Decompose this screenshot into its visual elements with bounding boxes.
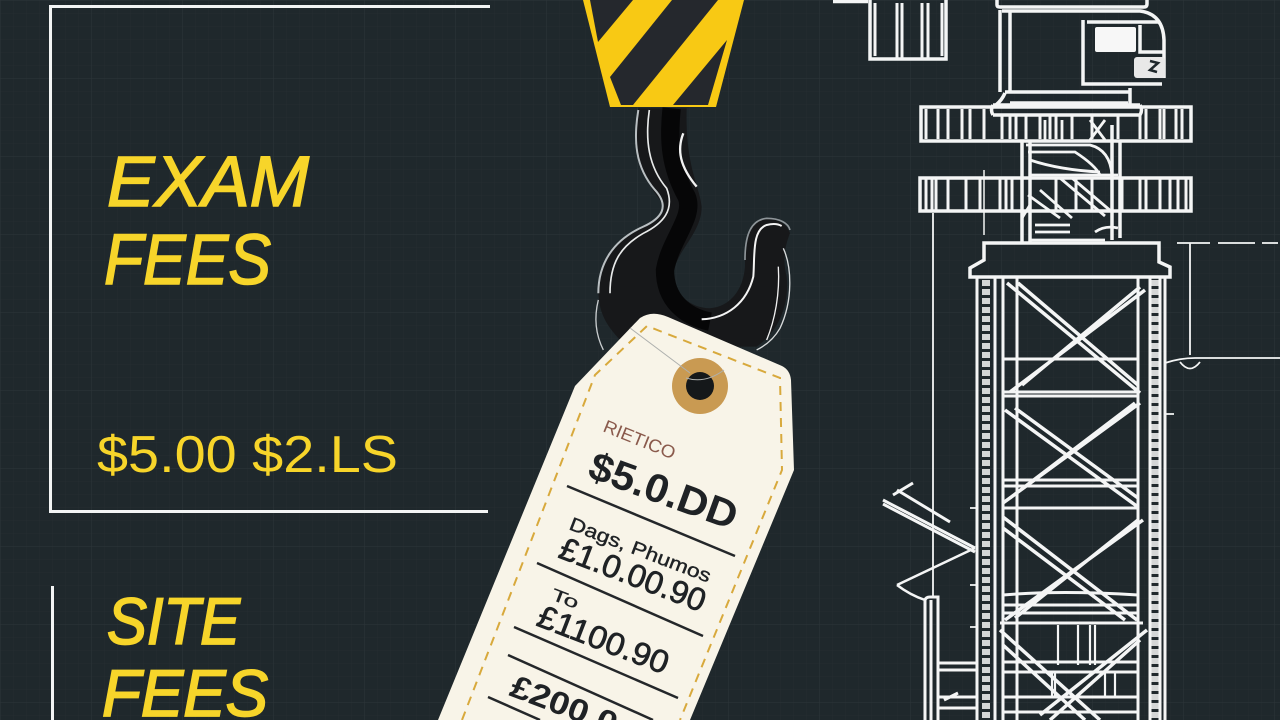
tag text: To <box>549 585 582 613</box>
tag eyelet <box>630 328 728 414</box>
blueprint: tower head <box>970 243 1170 277</box>
blueprint: tower structure <box>977 277 1165 720</box>
blueprint: window unit <box>833 0 946 59</box>
tag text: $5.0.DD <box>583 444 744 538</box>
blueprint: crane tower <box>833 0 1280 720</box>
site panel frame <box>51 586 54 720</box>
tag text: RIETICO <box>601 416 678 463</box>
heading: exam fees: FEES <box>104 221 271 300</box>
blueprint: upper platform <box>921 105 1191 141</box>
blueprint: ladder <box>925 597 977 720</box>
tag body <box>438 314 794 720</box>
tag text: Dags, Phumos <box>566 514 714 587</box>
blueprint: lower platform <box>920 178 1191 211</box>
tag stitching <box>462 326 782 720</box>
blueprint: side arm <box>883 483 975 600</box>
icon: crane hook <box>596 108 790 350</box>
heading: site fees: SITE <box>107 584 241 658</box>
blueprint: crane cab <box>996 0 1165 105</box>
panel frame <box>50 6 490 512</box>
panel: site fees <box>52 584 268 720</box>
exam fee amounts: $5.00 $2.LS <box>97 426 398 484</box>
price tag <box>438 314 794 720</box>
heading: exam fees <box>104 143 310 300</box>
tag text: £1.0.00.90 <box>554 530 711 619</box>
tag text: £1100.90 <box>532 598 674 681</box>
panel: exam fees <box>50 6 490 512</box>
tag text <box>505 416 744 720</box>
heading: exam fees: EXAM <box>107 143 310 222</box>
icon: hazard striped crane block <box>583 0 744 107</box>
blueprint: central column <box>984 120 1120 243</box>
tag rules <box>488 486 735 720</box>
heading: site fees <box>102 584 268 720</box>
blueprint: dimension lines <box>933 213 1280 627</box>
